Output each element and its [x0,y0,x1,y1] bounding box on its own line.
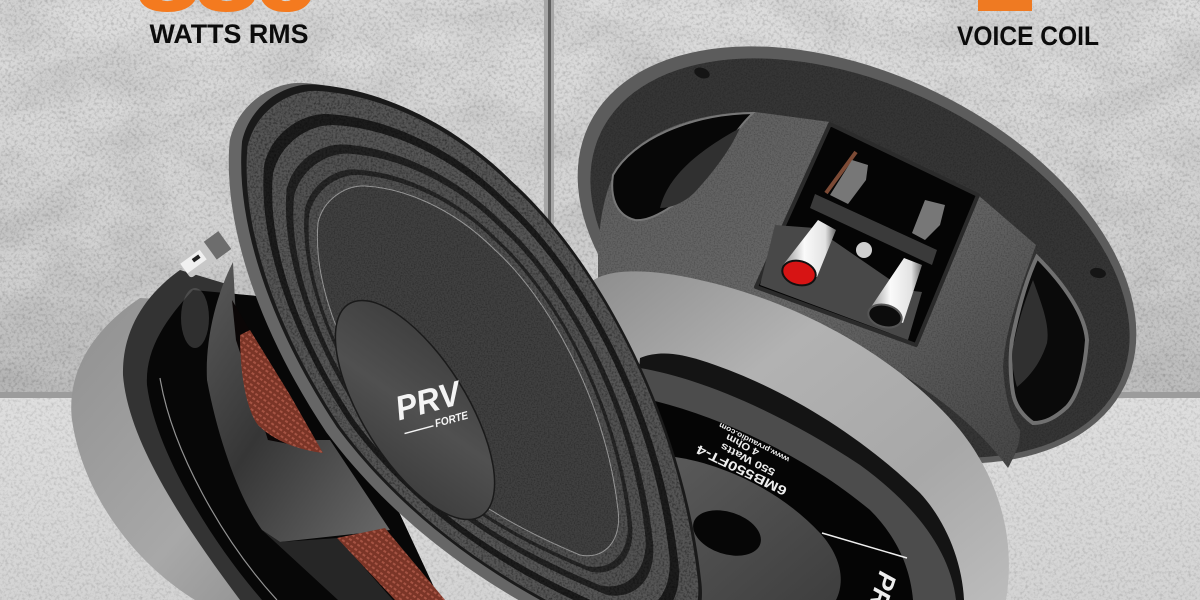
stat: voice coil [957,0,1099,51]
lower red coil [337,528,445,600]
surround [263,114,679,600]
label text: 6MB550FT-4 [693,441,789,499]
left magnet [71,298,240,600]
left basket opening [232,300,287,444]
stat: 550 watts RMS [138,0,316,49]
white highlight line [822,533,907,558]
label text: www.prvaudio.com [717,421,792,465]
left speaker [71,83,702,600]
label voice coil: VOICE COIL [957,21,1099,51]
cone [317,186,619,556]
basket window right [1011,257,1087,423]
red binding post [779,220,836,289]
basket texture [598,112,1036,468]
flange [510,0,1200,548]
logo: FORTE [434,410,470,430]
cone texture [317,186,619,556]
tab left [830,160,868,204]
label text: 550 Watts [718,440,777,477]
background: concrete floor [0,392,1200,600]
back plate [620,354,964,600]
black binding post [866,258,922,331]
number 2 [978,0,1032,11]
pole plate [668,456,841,600]
dust cap [334,300,496,520]
background: concrete wall [0,0,1200,394]
left back plate [123,270,440,600]
tab right [912,200,945,240]
basket window left [612,113,753,220]
black label ring [650,401,913,600]
magnet ring [588,271,1009,600]
upper red coil [240,330,323,453]
front frame [229,83,702,600]
lead wire [826,152,856,193]
terminal [178,231,231,278]
basket body [598,112,1036,468]
label watts rms: WATTS RMS [150,19,308,49]
right speaker [510,0,1200,600]
left basket [207,262,390,542]
screw [856,242,872,258]
lower plate [262,530,393,600]
label text: 4 Ohm [724,431,761,457]
pole hole [687,502,767,564]
terminal bar [810,194,937,265]
logo: PRV [391,374,468,428]
label text [693,421,903,600]
terminal recess [756,124,978,345]
